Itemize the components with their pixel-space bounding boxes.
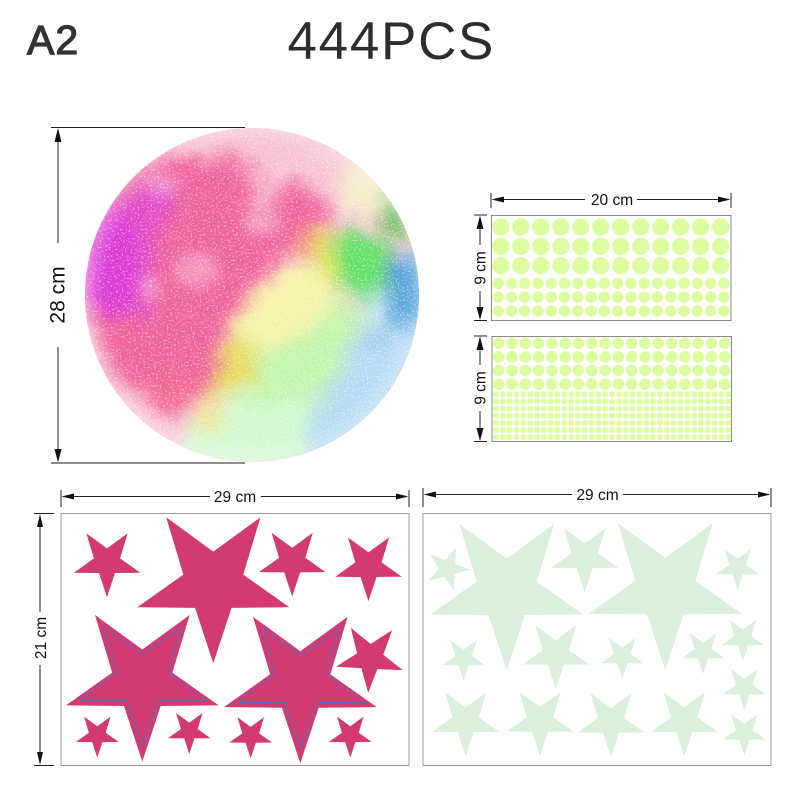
dimension: dots 20 cm (491, 192, 731, 209)
dimension: moon 28 cm (46, 128, 245, 463)
dimension: sheet 1 height 9 cm: 9 cm (472, 251, 490, 285)
title: 444PCS: 444PCS (288, 12, 495, 71)
panel: glow star sheet (422, 514, 771, 766)
dimension: pink sheet 29 cm: 29 cm (214, 489, 256, 506)
dimension: pink sheet 21 cm: 21 cm (33, 617, 50, 659)
moon sticker (85, 128, 419, 462)
dimension: green sheet 29 cm (423, 487, 771, 507)
dimension: sheet 2 height 9 cm (472, 336, 490, 442)
dimension: pink sheet 21 cm (33, 514, 54, 766)
dimension: sheet 1 height 9 cm (472, 215, 490, 320)
label: A2: A2 (27, 17, 79, 63)
panel: dot sheet 1 (491, 216, 731, 320)
dimension: green sheet 29 cm: 29 cm (576, 487, 619, 504)
panel: dot sheet 2 (492, 336, 732, 442)
dimension: pink sheet 29 cm (61, 489, 409, 507)
dimension: dots 20 cm: 20 cm (591, 192, 633, 209)
panel: pink star sheet (61, 514, 409, 766)
dimension: moon 28 cm: 28 cm (46, 266, 70, 324)
dimension: sheet 2 height 9 cm: 9 cm (472, 371, 490, 405)
